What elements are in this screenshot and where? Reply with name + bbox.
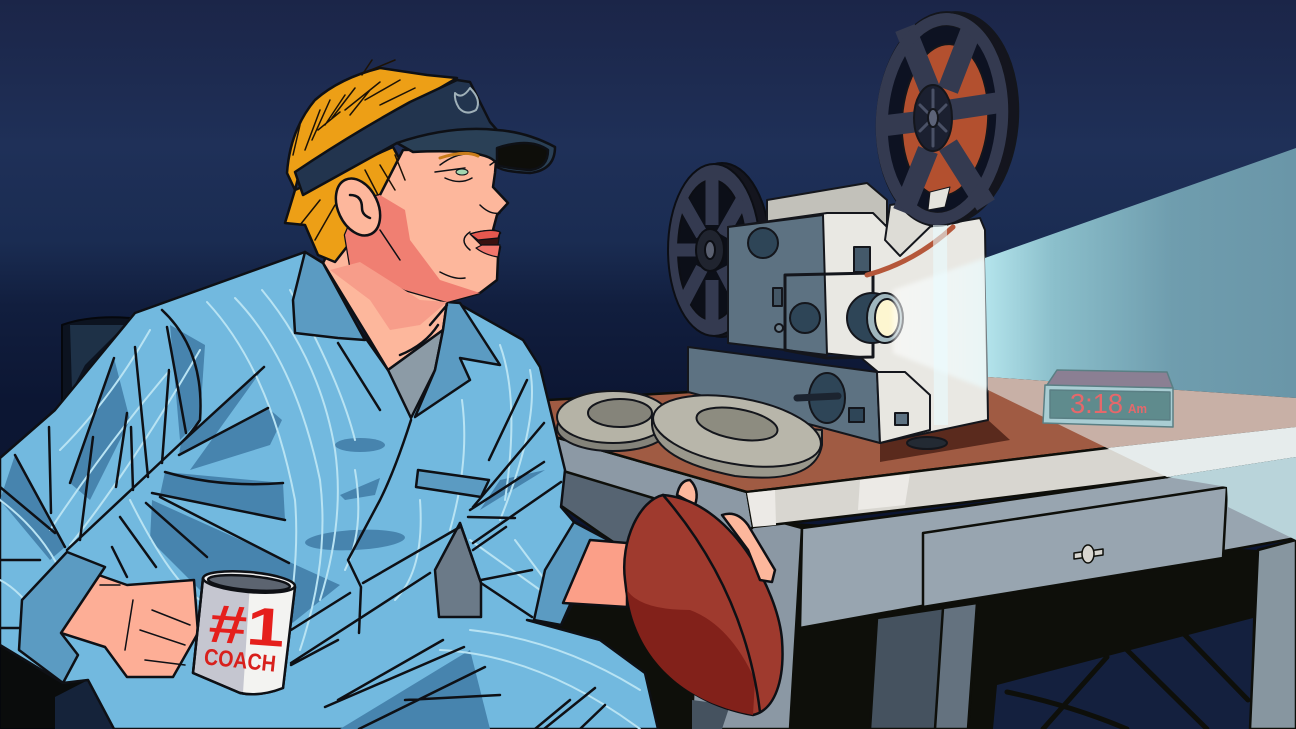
- mug label: COACH: [203, 643, 277, 677]
- coffee hand: [61, 573, 198, 677]
- right desk leg: [1250, 540, 1296, 729]
- lens panel frame: [785, 273, 873, 358]
- hair strokes: [293, 60, 415, 240]
- pajama shading: [0, 325, 545, 729]
- carry handle: [767, 183, 887, 225]
- lens: [847, 293, 903, 343]
- pajamas: [0, 252, 658, 729]
- clock meridiem: Am: [1128, 401, 1147, 416]
- base right: [877, 372, 930, 443]
- pajama fold lines: [0, 310, 605, 729]
- under desk darkness: [480, 520, 1258, 729]
- ball fingers: [722, 514, 775, 582]
- mug: [193, 568, 296, 694]
- projector: [688, 8, 1025, 449]
- man: [0, 60, 783, 729]
- small switch: [773, 288, 782, 306]
- selector dial: [797, 373, 845, 423]
- square button: [895, 413, 908, 425]
- foot: [907, 437, 947, 449]
- window under desk with cables: [993, 618, 1253, 729]
- drawer: [923, 487, 1227, 607]
- housing light stripe: [933, 225, 948, 425]
- main housing: [728, 213, 988, 443]
- chair: [0, 317, 130, 729]
- desk top shadow: [880, 420, 1010, 462]
- right cuff: [534, 522, 608, 625]
- eye and brow: [435, 153, 497, 182]
- highlight on desk edge: [747, 474, 910, 527]
- top hair: [287, 68, 457, 190]
- right collar: [415, 302, 500, 417]
- undershirt: [388, 330, 443, 418]
- front film can: [648, 384, 826, 478]
- clock time: 3:18: [1070, 388, 1123, 419]
- projector beam: [985, 148, 1296, 398]
- top reel arm: [885, 200, 935, 256]
- left collar: [293, 252, 365, 340]
- beam on desk edge: [1107, 427, 1296, 477]
- ear: [327, 171, 389, 243]
- head: [345, 148, 508, 302]
- light cone through housing: [893, 258, 988, 390]
- knob upper: [748, 228, 778, 258]
- back hair: [285, 147, 407, 262]
- rear film can: [557, 391, 669, 451]
- rear film reel: [668, 163, 770, 337]
- face shadow: [345, 195, 480, 302]
- grey block: [854, 247, 870, 272]
- breast pocket: [416, 470, 489, 497]
- desk front skirt: [800, 457, 1296, 628]
- neck shading: [330, 262, 447, 330]
- visor logo: [455, 88, 478, 113]
- football: [624, 495, 783, 715]
- visor underside: [497, 143, 548, 170]
- desk top white edge: [747, 427, 1296, 527]
- left cuff: [19, 552, 105, 683]
- base unit: [688, 347, 880, 443]
- chair back through gap: [435, 523, 481, 617]
- knob lower: [790, 303, 820, 333]
- pajama stripes: [0, 290, 640, 729]
- screw: [775, 324, 783, 332]
- desk side shade: [560, 470, 653, 560]
- desk side: [555, 437, 753, 560]
- mouth: [470, 230, 500, 257]
- top film reel: [870, 8, 1025, 230]
- left desk leg: [692, 500, 802, 729]
- film strip: [867, 227, 953, 275]
- beam on desk surface: [988, 377, 1296, 448]
- desk: [548, 377, 1296, 729]
- nose and cheek: [380, 205, 500, 278]
- mug number: #1: [207, 594, 287, 659]
- visor brim: [397, 129, 555, 173]
- small knob: [849, 408, 864, 422]
- desk top surface: [548, 377, 1296, 492]
- beam on desk front: [1167, 457, 1296, 540]
- side panel: [728, 215, 827, 355]
- fingertip above ball: [677, 480, 697, 505]
- alarm clock: [1043, 370, 1173, 427]
- knuckle lines: [100, 585, 190, 665]
- chest crease: [400, 305, 447, 355]
- ball hand: [563, 540, 627, 607]
- middle desk leg: [870, 603, 977, 729]
- neck and chest: [323, 230, 447, 370]
- visor band: [295, 80, 497, 195]
